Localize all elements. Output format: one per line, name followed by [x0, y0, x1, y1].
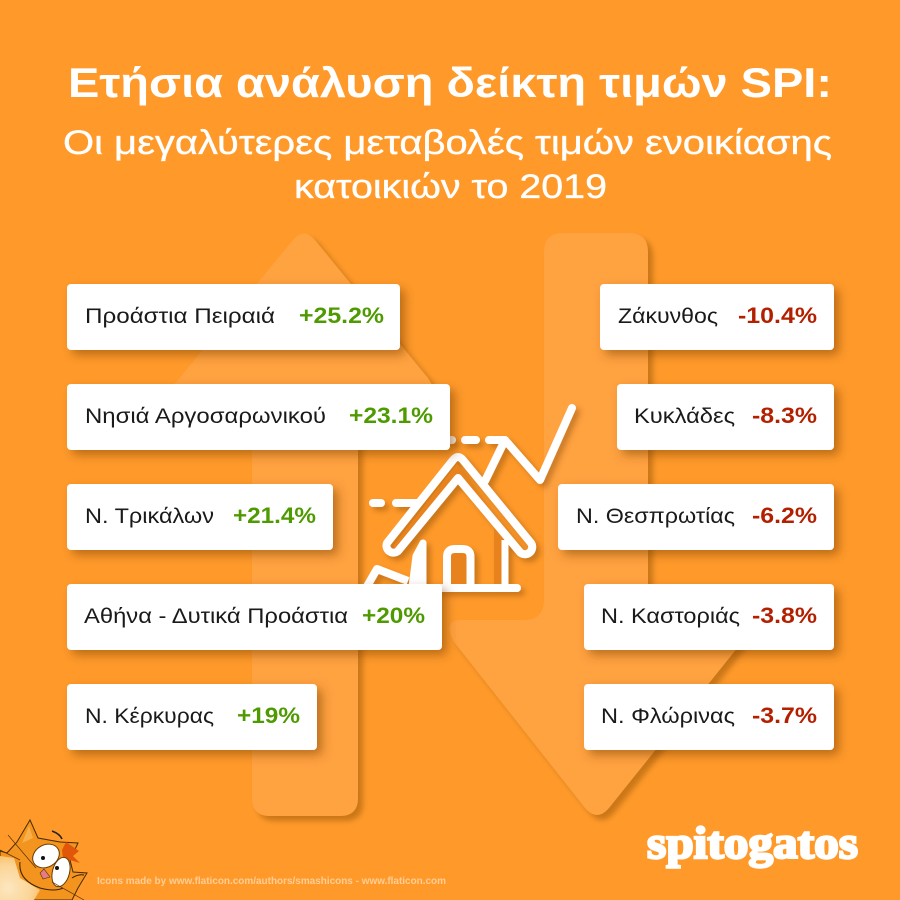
- icon: house with rising chart: [366, 408, 572, 588]
- card: Ζάκυνθος: -10.4%: [738, 303, 817, 328]
- card: Ν. Θεσπρωτίας: -6.2%: [752, 503, 817, 528]
- cat head and body: [0, 820, 87, 900]
- card: Νησιά Αργοσαρωνικού: [67, 384, 450, 450]
- card: Ν. Θεσπρωτίας: [558, 484, 834, 550]
- title: Ετήσια ανάλυση δείκτη τιμών SPI:: [68, 59, 832, 106]
- card: Ν. Φλώρινας: Ν. Φλώρινας: [601, 704, 735, 728]
- card: Αθήνα - Δυτικά Προάστια: +20%: [362, 603, 425, 628]
- card: Ζάκυνθος: [600, 284, 834, 350]
- card: Νησιά Αργοσαρωνικού: +23.1%: [349, 403, 433, 428]
- cat eyes: [28, 839, 64, 873]
- card: Ν. Καστοριάς: -3.8%: [752, 603, 817, 628]
- cat brow: [52, 831, 62, 839]
- card: Ν. Κέρκυρας: Ν. Κέρκυρας: [85, 704, 214, 728]
- mascot: cat: [0, 820, 87, 900]
- card: Ν. Κέρκυρας: [67, 684, 317, 750]
- icon: ground: [405, 584, 517, 592]
- cat whiskers: [0, 835, 84, 900]
- card: Προάστια Πειραιά: +25.2%: [299, 303, 384, 328]
- arrow: down: [450, 233, 752, 815]
- icon: walls: [412, 540, 505, 587]
- credit: Icons made by www.flaticon.com/authors/smashicons - www.flaticon.com: [97, 876, 446, 887]
- card: Ν. Κέρκυρας: +19%: [237, 703, 300, 728]
- card: Προάστια Πειραιά: [67, 284, 400, 350]
- card: Κυκλάδες: -8.3%: [752, 403, 817, 428]
- card: Ν. Τρικάλων: [67, 484, 333, 550]
- cat outlines: [20, 862, 84, 890]
- card: Κυκλάδες: [617, 384, 834, 450]
- card: Προάστια Πειραιά: Προάστια Πειραιά: [85, 304, 275, 328]
- cat nose: [40, 869, 50, 879]
- card: Ζάκυνθος: Ζάκυνθος: [618, 304, 718, 328]
- subtitle: κατοικιών το 2019: [294, 168, 607, 206]
- icon: lower chart line: [366, 569, 408, 588]
- icon: chart line: [373, 408, 572, 503]
- card: Νησιά Αργοσαρωνικού: Νησιά Αργοσαρωνικού: [85, 404, 326, 428]
- card: Ν. Τρικάλων: Ν. Τρικάλων: [85, 504, 214, 528]
- subtitle: Οι μεγαλύτερες μεταβολές τιμών ενοικίασης: [63, 124, 832, 162]
- card: Ν. Θεσπρωτίας: Ν. Θεσπρωτίας: [576, 504, 735, 528]
- cat inner ear: [22, 826, 33, 843]
- arrow: up: [170, 234, 436, 816]
- card: Ν. Φλώρινας: [584, 684, 834, 750]
- card: Ν. Φλώρινας: -3.7%: [752, 703, 817, 728]
- card: Αθήνα - Δυτικά Προάστια: Αθήνα - Δυτικά Προάστια: [84, 604, 348, 628]
- logo: spitogatos: spitogatos: [647, 817, 858, 868]
- card: Ν. Τρικάλων: +21.4%: [233, 503, 316, 528]
- subtitle: [63, 124, 832, 206]
- card: Αθήνα - Δυτικά Προάστια: [67, 584, 442, 650]
- card: Ν. Καστοριάς: [584, 584, 834, 650]
- icon: roof shading: [393, 464, 503, 585]
- icon: roof: [386, 457, 532, 554]
- icon: door: [447, 549, 470, 587]
- cat cheek: [0, 856, 40, 900]
- card: Κυκλάδες: Κυκλάδες: [634, 404, 735, 428]
- card: Ν. Καστοριάς: Ν. Καστοριάς: [601, 604, 740, 628]
- cat hair: [62, 842, 80, 863]
